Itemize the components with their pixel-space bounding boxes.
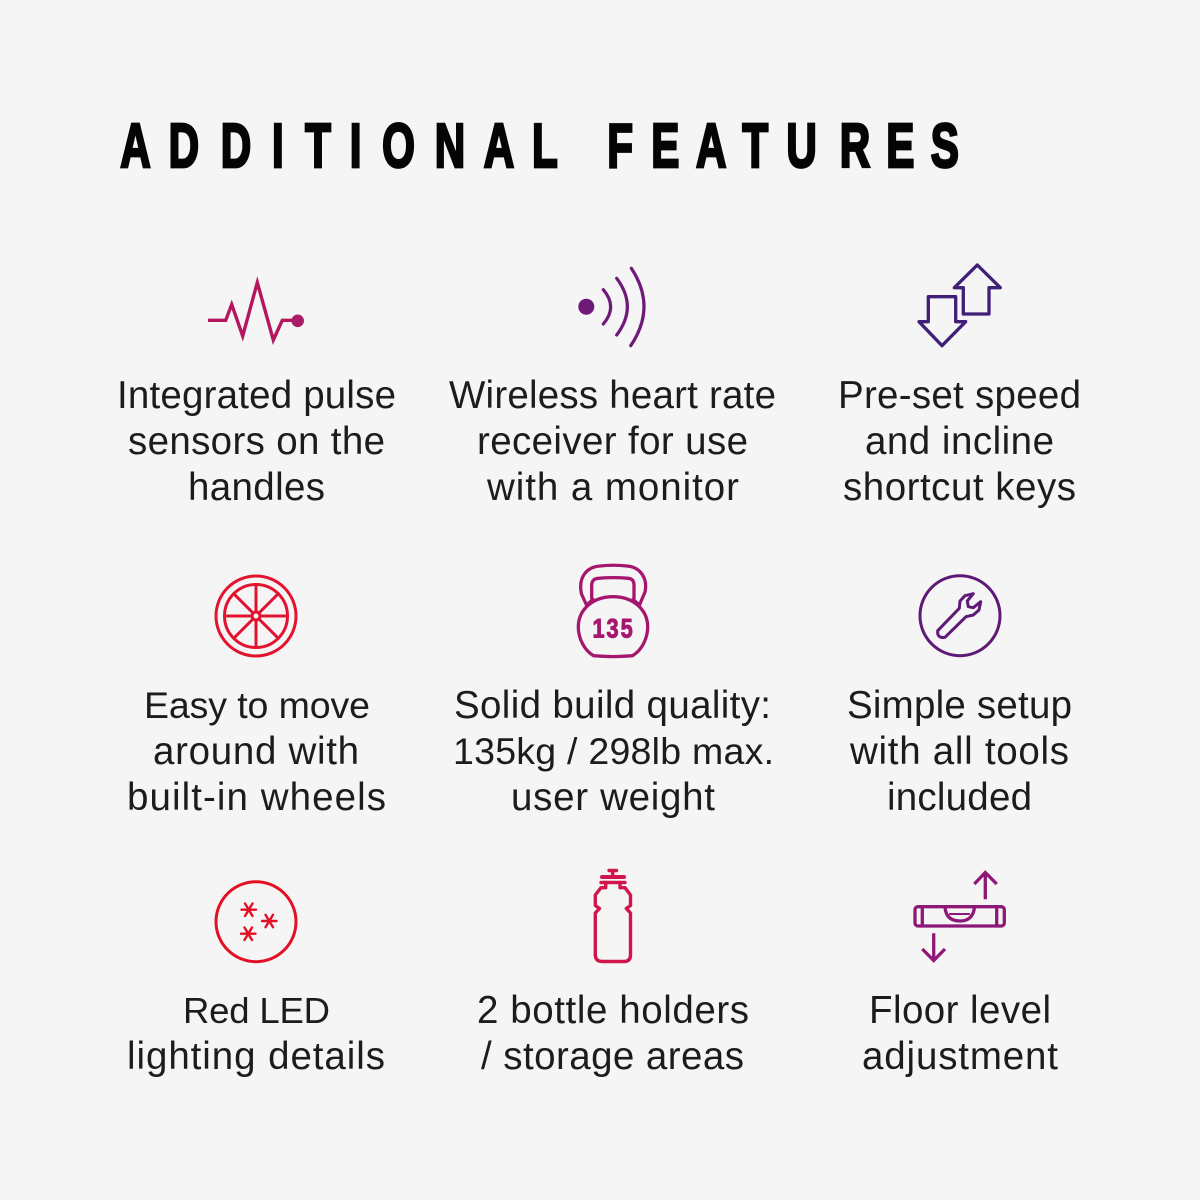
text: floor level adjustment bbox=[862, 989, 1058, 1078]
feature: integrated pulse sensors bbox=[117, 282, 396, 509]
text: build quality: user weight bbox=[511, 776, 715, 819]
text: built-in wheels: built-in wheels bbox=[127, 776, 386, 819]
icon: water bottle bbox=[595, 870, 630, 962]
text: simple setup: Simple setup bbox=[847, 684, 1072, 727]
icon: kettlebell: 135 bbox=[592, 615, 633, 644]
feature: build quality bbox=[453, 565, 774, 819]
text: pre-set shortcut keys bbox=[838, 374, 1081, 509]
text: bottle holders bbox=[477, 989, 749, 1078]
feature: wireless heart rate receiver bbox=[449, 268, 776, 509]
feature: built-in wheels bbox=[127, 576, 386, 819]
text: wireless heart rate receiver: with a monitor bbox=[486, 466, 739, 509]
text: wireless heart rate receiver: Wireless heart rate bbox=[449, 374, 776, 417]
text: wireless heart rate receiver: receiver for use bbox=[477, 420, 748, 463]
feature: floor level adjustment bbox=[862, 872, 1058, 1078]
icon: up and down arrows bbox=[919, 265, 1000, 346]
icon: spirit level with arrows bbox=[915, 872, 1004, 960]
icon: wireless signal bbox=[578, 268, 644, 346]
text: build quality: Solid build quality: bbox=[454, 684, 771, 727]
icon: wheel bbox=[216, 576, 296, 656]
text: red led lighting: Red LED bbox=[183, 990, 330, 1031]
feature: pre-set shortcut keys bbox=[838, 265, 1081, 509]
text: simple setup: included bbox=[887, 776, 1032, 819]
text: integrated pulse sensors: handles bbox=[188, 466, 325, 509]
icon: wrench in circle bbox=[920, 576, 1000, 656]
text: simple setup: with all tools bbox=[849, 730, 1069, 773]
text: bottle holders: / storage areas bbox=[481, 1035, 744, 1078]
text: built-in wheels: around with bbox=[153, 730, 359, 773]
text: simple setup bbox=[847, 684, 1072, 819]
title: ADDITIONAL FEATURES bbox=[120, 112, 959, 181]
icon: kettlebell bbox=[578, 565, 648, 657]
feature: red led lighting bbox=[127, 882, 385, 1078]
text: red led lighting: lighting details bbox=[127, 1035, 385, 1078]
text: pre-set shortcut keys: and incline bbox=[865, 420, 1054, 463]
text: integrated pulse sensors bbox=[117, 374, 396, 509]
feature: bottle holders bbox=[477, 870, 749, 1078]
text: bottle holders: 2 bottle holders bbox=[477, 989, 749, 1032]
text: build quality: 135kg / 298lb max. bbox=[453, 730, 774, 772]
text: integrated pulse sensors: Integrated pulse bbox=[117, 374, 396, 417]
text: wireless heart rate receiver bbox=[449, 374, 776, 509]
text: built-in wheels bbox=[127, 684, 386, 819]
text: integrated pulse sensors: sensors on the bbox=[128, 420, 385, 463]
feature: simple setup bbox=[847, 576, 1072, 819]
text: floor level adjustment: adjustment bbox=[862, 1035, 1058, 1078]
text: red led lighting bbox=[127, 990, 385, 1078]
icon: pulse line bbox=[208, 282, 304, 340]
text: pre-set shortcut keys: shortcut keys bbox=[843, 466, 1076, 509]
text: built-in wheels: Easy to move bbox=[144, 684, 370, 726]
icon: led lights bbox=[216, 882, 296, 962]
text: floor level adjustment: Floor level bbox=[869, 989, 1051, 1032]
text: pre-set shortcut keys: Pre-set speed bbox=[838, 374, 1081, 417]
text: build quality bbox=[453, 684, 774, 819]
